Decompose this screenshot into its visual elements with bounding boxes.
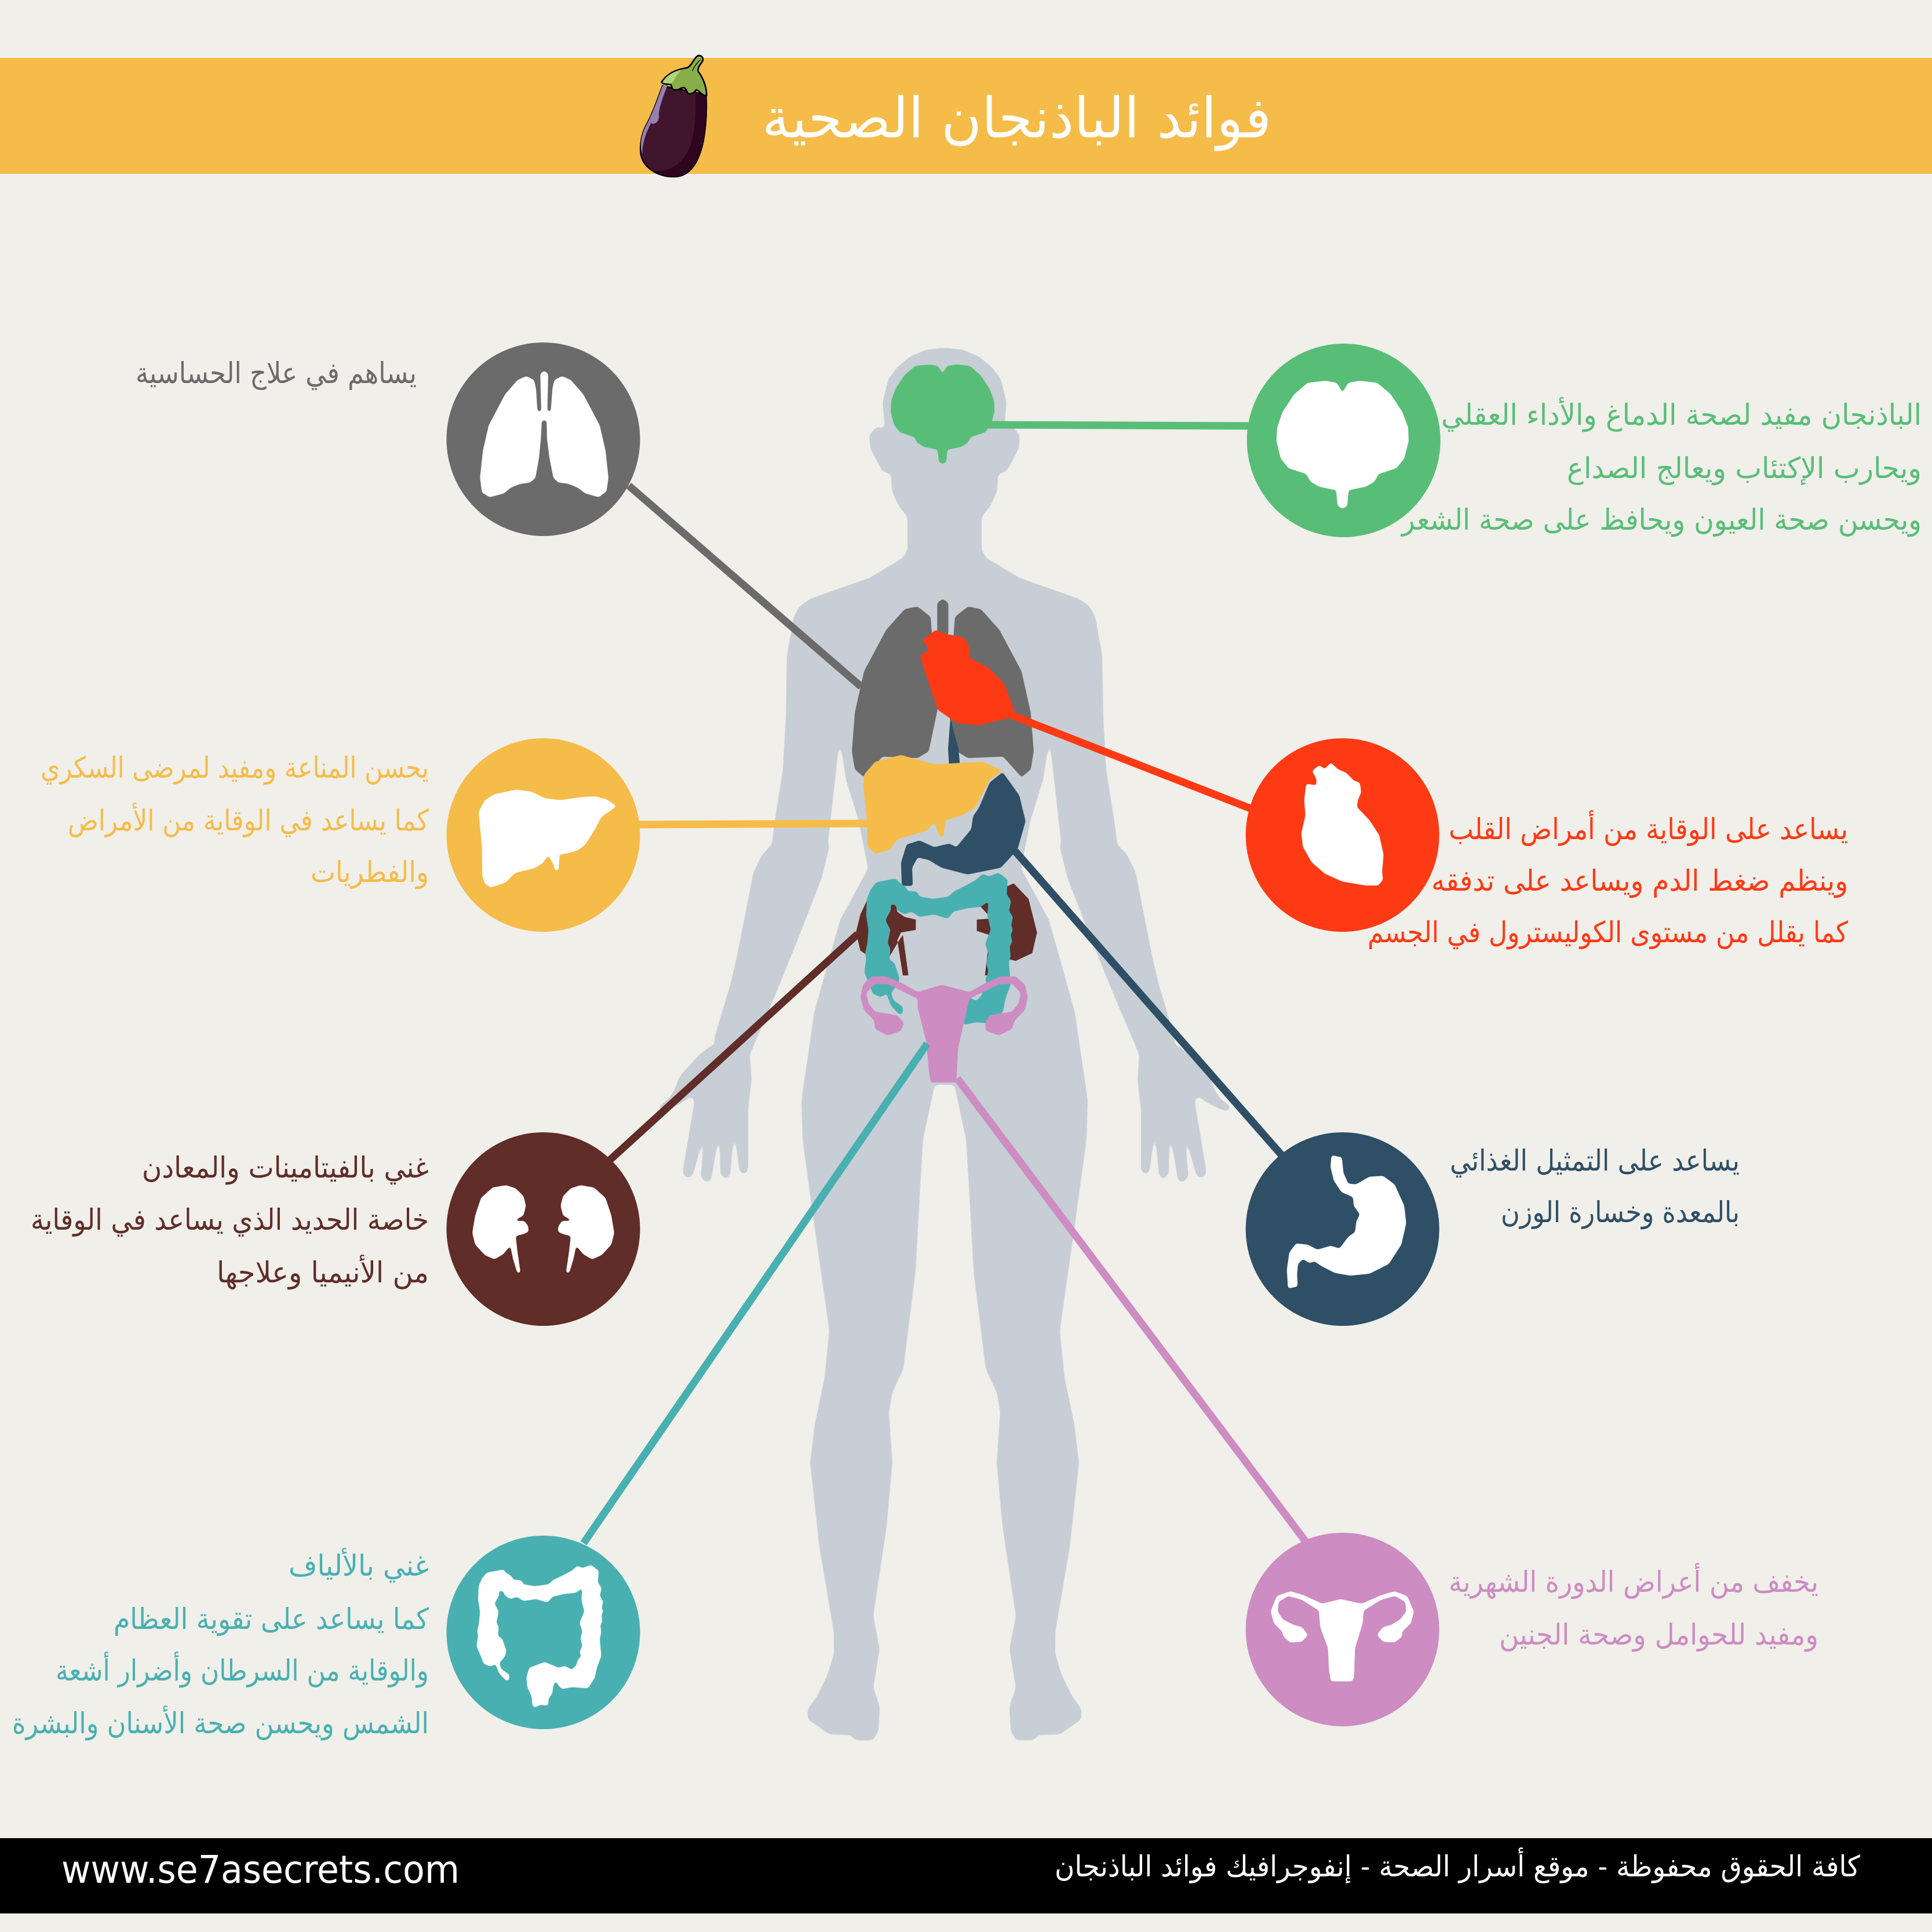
text: brain: ويحارب الإكتئاب ويعالج الصداع xyxy=(1567,451,1922,486)
panel: stomach benefit xyxy=(1015,851,1740,1326)
text: lungs: يساهم في علاج الحساسية xyxy=(136,356,417,390)
organ: stomach xyxy=(901,772,1026,886)
panel: uterus benefit xyxy=(957,1078,1818,1726)
organs on the body xyxy=(852,364,1037,1082)
icon: kidneys xyxy=(472,1185,614,1273)
connector line: heart xyxy=(1011,715,1252,809)
text: liver: والفطريات xyxy=(311,855,429,890)
panel: kidneys benefit xyxy=(31,934,858,1326)
organ: uterus xyxy=(861,976,1028,1082)
text: liver: كما يساعد في الوقاية من الأمراض xyxy=(68,803,429,837)
text: colon: كما يساعد على تقوية العظام xyxy=(114,1602,429,1636)
text: colon: الشمس ويحسن صحة الأسنان والبشرة xyxy=(12,1705,429,1741)
circle: colon xyxy=(446,1536,640,1729)
panel: colon benefit xyxy=(12,1044,927,1741)
connector line: stomach xyxy=(1015,851,1283,1157)
panel: brain benefit xyxy=(985,344,1922,537)
connector line: liver xyxy=(635,823,869,825)
text: uterus: ومفيد للحوامل وصحة الجنين xyxy=(1499,1618,1818,1652)
text: colon xyxy=(12,1548,429,1741)
icon: stomach xyxy=(1287,1155,1406,1288)
connector line: colon xyxy=(584,1044,927,1543)
text: brain xyxy=(1400,397,1922,537)
text: stomach xyxy=(1450,1144,1740,1230)
text: stomach: بالمعدة وخسارة الوزن xyxy=(1501,1195,1740,1230)
organ: esophagus xyxy=(948,719,960,768)
text: colon: غني بالألياف xyxy=(289,1548,429,1583)
organ: colon xyxy=(865,873,1013,1025)
text: heart: يساعد على الوقاية من أمراض القلب xyxy=(1449,810,1848,846)
circle: kidneys xyxy=(446,1132,640,1326)
text: kidneys: من الأنيميا وعلاجها xyxy=(217,1255,429,1290)
circle: brain xyxy=(1247,344,1441,537)
organ: heart xyxy=(920,630,1015,726)
text: liver: يحسن المناعة ومفيد لمرضى السكري xyxy=(41,751,429,785)
icon: uterus xyxy=(1271,1591,1414,1682)
footer bar xyxy=(0,1838,1932,1913)
icon: lungs xyxy=(480,371,608,497)
text: liver xyxy=(41,751,429,890)
circle: stomach xyxy=(1246,1132,1439,1326)
text: kidneys: خاصة الحديد الذي يساعد في الوقاية xyxy=(31,1203,429,1237)
panel: heart benefit xyxy=(1011,715,1848,950)
icon: brain xyxy=(1277,381,1409,509)
icon: liver xyxy=(479,790,617,887)
icon: colon xyxy=(476,1565,603,1708)
text: kidneys: غني بالفيتامينات والمعادن xyxy=(142,1151,429,1185)
footer credits: كافة الحقوق محفوظة - موقع أسرار الصحة - إنفوجرافيك فوائد الباذنجان xyxy=(1055,1847,1860,1884)
header band xyxy=(0,58,1932,174)
connector line: uterus xyxy=(957,1078,1307,1544)
panel: lungs benefit xyxy=(136,342,861,687)
organ: lungs xyxy=(852,599,1034,777)
human body silhouette xyxy=(658,348,1231,1740)
text: brain: الباذنجان مفيد لصحة الدماغ والأداء العقلي xyxy=(1441,397,1922,432)
title: فوائد الباذنجان الصحية xyxy=(762,86,1271,151)
icon: heart xyxy=(1302,763,1384,885)
connector line: kidneys xyxy=(608,934,858,1161)
text: uterus: يخفف من أعراض الدورة الشهرية xyxy=(1449,1563,1818,1599)
organ: brain xyxy=(891,364,994,464)
text: stomach: يساعد على التمثيل الغذائي xyxy=(1450,1144,1740,1178)
text: heart: وينظم ضغط الدم ويساعد على تدفقه xyxy=(1431,864,1848,898)
connector line: brain xyxy=(985,425,1252,426)
text: heart xyxy=(1368,810,1848,950)
organ: liver xyxy=(863,755,1003,854)
text: heart: كما يقلل من مستوى الكوليسترول في الجسم xyxy=(1368,916,1848,950)
circle: lungs xyxy=(446,342,640,536)
circle: liver xyxy=(446,738,640,932)
icon: eggplant xyxy=(640,56,706,177)
text: uterus xyxy=(1449,1563,1818,1652)
organ: kidneys xyxy=(856,883,1037,975)
text: colon: والوقاية من السرطان وأضرار أشعة xyxy=(56,1652,429,1688)
connector line: lungs xyxy=(629,486,861,687)
circle: heart xyxy=(1246,738,1439,932)
footer url: www.se7asecrets.com xyxy=(61,1847,460,1892)
panel: liver benefit xyxy=(41,738,869,932)
circle: uterus xyxy=(1246,1533,1439,1726)
text: kidneys xyxy=(31,1151,429,1290)
